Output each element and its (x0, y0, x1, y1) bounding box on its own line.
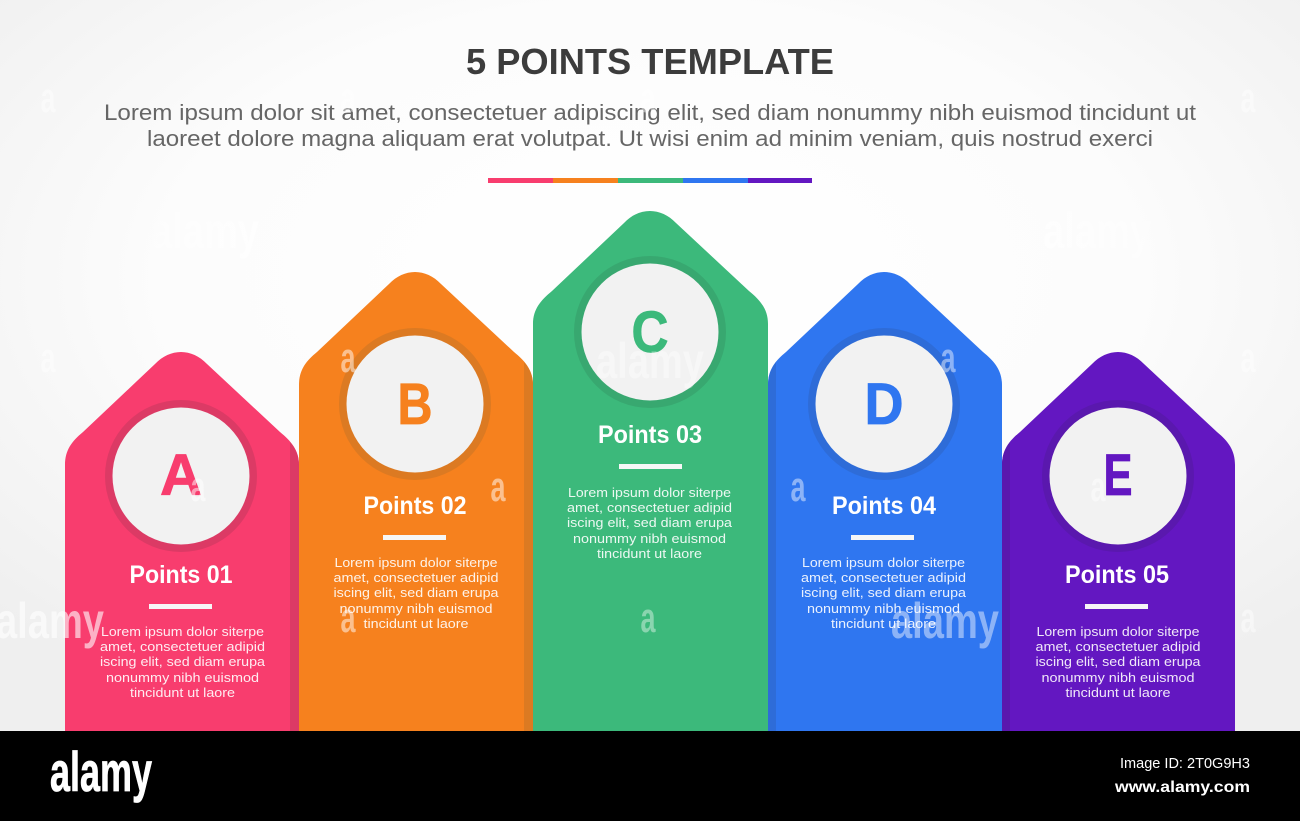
letter D: D (864, 372, 904, 437)
body text E: tincidunt ut laore (1066, 685, 1170, 700)
body text C: iscing elit, sed diam erupa (567, 515, 733, 530)
body text D: Lorem ipsum dolor siterpe (802, 555, 965, 570)
body text A: Lorem ipsum dolor siterpe (101, 624, 264, 639)
underline E (1085, 604, 1148, 609)
panel: point C (533, 211, 768, 731)
body text D (801, 555, 967, 631)
side shadow A (290, 442, 299, 731)
body text A: iscing elit, sed diam erupa (100, 654, 266, 669)
stock watermarks: a (340, 594, 356, 641)
colour divider bar (488, 178, 812, 183)
body text E (1036, 624, 1201, 700)
stock watermarks: a (790, 463, 806, 510)
footer logo: alamy (50, 740, 152, 803)
arrow shape E (1002, 352, 1235, 731)
panel: point E (1002, 352, 1235, 731)
body text D: amet, consectetuer adipid (801, 570, 966, 585)
stock watermarks: alamy (151, 203, 259, 259)
stock watermarks: alamy (1043, 203, 1151, 259)
stock watermarks: a (940, 334, 956, 381)
stock watermarks: alamy (596, 333, 704, 389)
letter B: B (398, 372, 432, 437)
body text D: nonummy nibh euismod (807, 601, 960, 616)
body text C (567, 485, 733, 561)
heading B: Points 02 (364, 492, 466, 520)
image id: Image ID: 2T0G9H3 (1120, 755, 1250, 772)
body text B: tincidunt ut laore (364, 616, 468, 631)
badge circle E (1050, 408, 1186, 544)
website: www.alamy.com (1114, 779, 1250, 796)
stock watermarks: a (190, 463, 206, 510)
stock watermarks: alamy (891, 593, 999, 649)
stock watermarks: a (40, 74, 56, 121)
underline A (149, 604, 212, 609)
badge circle A (112, 408, 250, 544)
body text A: tincidunt ut laore (130, 685, 235, 700)
body text D: tincidunt ut laore (831, 616, 936, 631)
stock watermarks: a (1240, 74, 1256, 121)
badge ring E (1042, 400, 1194, 552)
body text A: nonummy nibh euismod (106, 670, 259, 685)
badge ring A (105, 400, 257, 552)
body text E: Lorem ipsum dolor siterpe (1036, 624, 1200, 639)
body text B: amet, consectetuer adipid (334, 570, 498, 585)
subtitle text: laoreet dolore magna aliquam erat volutpat. Ut wisi enim ad minim veniam, quis nostrud exerci (147, 126, 1153, 151)
stock watermarks: a (640, 594, 656, 641)
stock watermarks (0, 74, 1256, 649)
body text C: Lorem ipsum dolor siterpe (568, 485, 731, 500)
badge ring D (808, 328, 960, 480)
subtitle text (104, 100, 1196, 151)
stock watermarks: a (40, 334, 56, 381)
side shadow D (768, 362, 776, 731)
stock watermarks: a (1240, 334, 1256, 381)
heading C: Points 03 (598, 421, 702, 449)
arrow shape C (533, 211, 768, 731)
body text E: amet, consectetuer adipid (1036, 639, 1200, 654)
letter C: C (632, 300, 668, 365)
underline B (383, 535, 446, 540)
badge ring B (339, 328, 491, 480)
stock watermarks: a (490, 463, 506, 510)
panel: point A (65, 352, 299, 731)
badge circle C (582, 264, 718, 400)
body text A (100, 624, 266, 700)
side shadow E (1002, 442, 1010, 731)
stock watermarks: a (1240, 594, 1256, 641)
arrow shape D (768, 272, 1002, 731)
body text E: iscing elit, sed diam erupa (1036, 654, 1201, 669)
body text B: nonummy nibh euismod (340, 601, 492, 616)
title: 5 POINTS TEMPLATE (466, 41, 834, 82)
panel: point D (768, 272, 1002, 731)
body text C: amet, consectetuer adipid (567, 500, 732, 515)
stock watermarks: a (340, 334, 356, 381)
body text B: Lorem ipsum dolor siterpe (334, 555, 498, 570)
body text A: amet, consectetuer adipid (100, 639, 265, 654)
badge circle D (816, 336, 952, 472)
badge circle B (346, 336, 484, 472)
stock watermarks: a (1090, 463, 1106, 510)
badge ring C (574, 256, 726, 408)
underline C (619, 464, 682, 469)
body text C: tincidunt ut laore (597, 546, 702, 561)
footer bar (0, 731, 1300, 821)
underline D (851, 535, 914, 540)
arrow shape A (65, 352, 299, 731)
body text B: iscing elit, sed diam erupa (334, 585, 499, 600)
arrow shape B (299, 272, 533, 731)
body text B (334, 555, 499, 631)
body text C: nonummy nibh euismod (573, 531, 726, 546)
body text E: nonummy nibh euismod (1042, 670, 1194, 685)
subtitle text: Lorem ipsum dolor sit amet, consectetuer adipiscing elit, sed diam nonummy nibh euismod tincidunt ut (104, 100, 1196, 125)
stock watermarks: alamy (0, 593, 104, 649)
heading D: Points 04 (832, 492, 936, 520)
side shadow B (524, 362, 533, 731)
body text D: iscing elit, sed diam erupa (801, 585, 967, 600)
panel: point B (299, 272, 533, 731)
letter A: A (160, 443, 202, 508)
letter E: E (1104, 443, 1132, 508)
heading E: Points 05 (1065, 561, 1169, 589)
stock watermarks: a (640, 74, 656, 121)
heading A: Points 01 (130, 561, 233, 589)
stock watermarks: a (340, 74, 356, 121)
